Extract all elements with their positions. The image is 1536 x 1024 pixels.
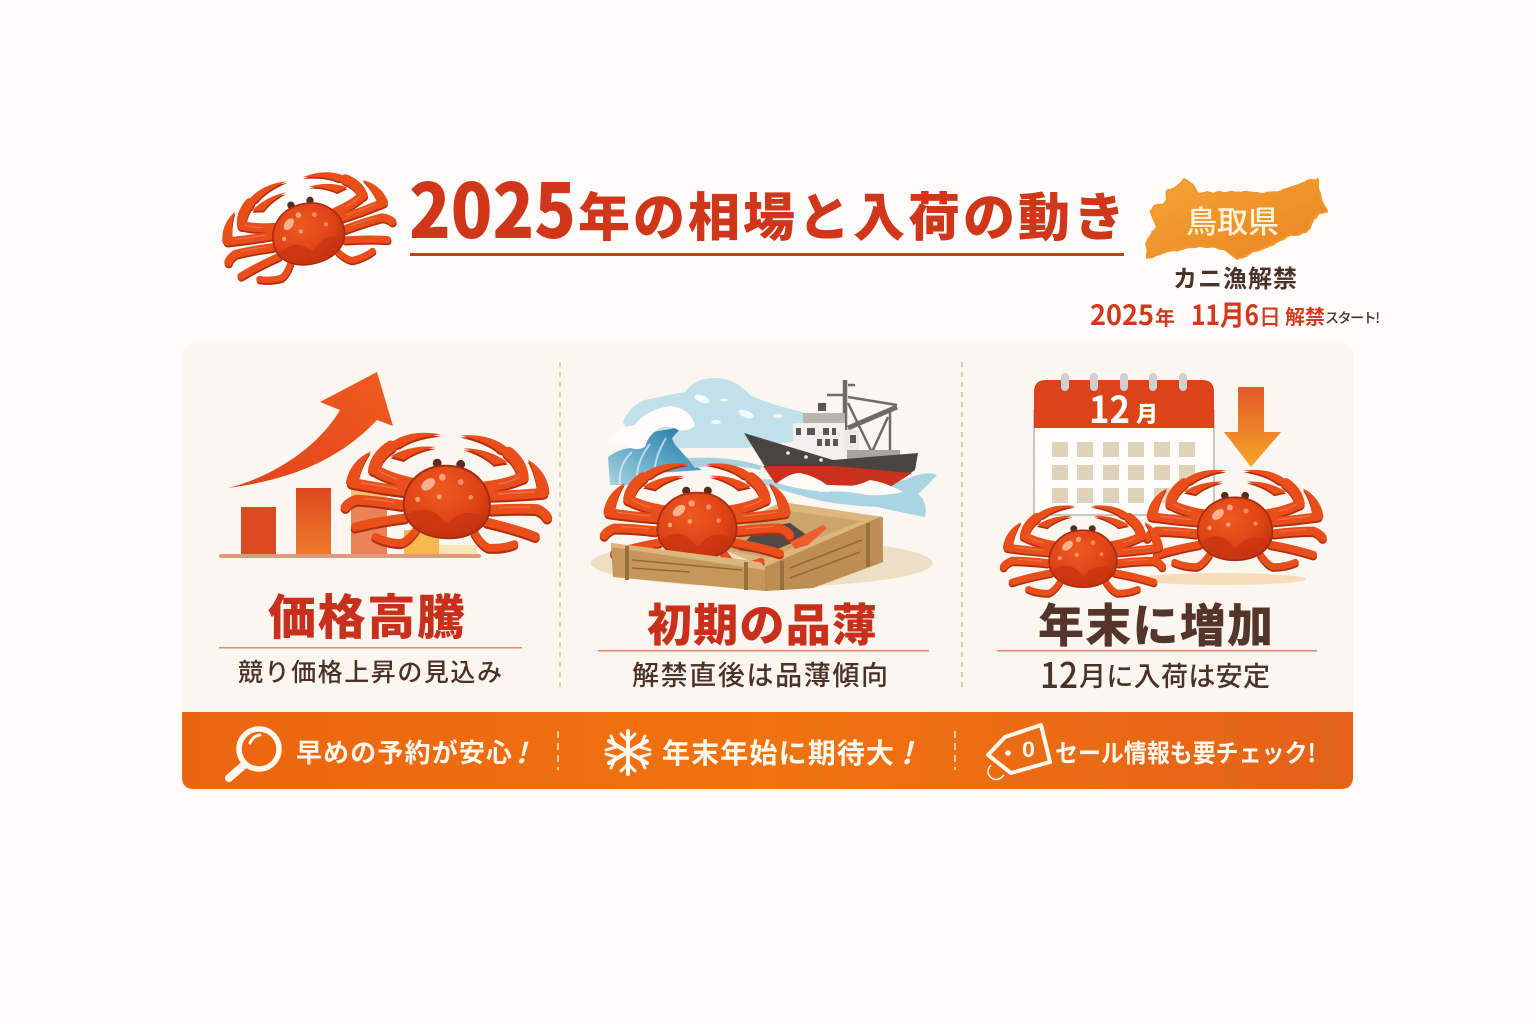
calendar: 月 [1136, 397, 1158, 429]
calendar: 12 [1089, 380, 1130, 434]
wave [608, 406, 702, 485]
icon: large crab [1147, 470, 1323, 568]
text: opening date: 解禁 [1285, 301, 1325, 330]
sea [687, 458, 937, 517]
text: opening date: 11月6 [1191, 294, 1259, 334]
icon: price tag [988, 725, 1050, 780]
title: 年の相場と入荷の動き [578, 176, 1125, 251]
title underline [410, 253, 1124, 256]
sand shadow [591, 539, 933, 587]
heading: 初期の品薄 [647, 589, 877, 654]
map: Tottori prefecture [1146, 178, 1327, 259]
panel: price surge [219, 372, 552, 689]
text: check sale info: セール情報も要チェック! [1055, 734, 1316, 770]
divider rule [997, 650, 1317, 652]
text: opening date: スタート! [1325, 308, 1380, 328]
description: 月に入荷は安定 [1079, 655, 1270, 694]
divider [559, 362, 561, 690]
description: 競り価格上昇の見込み [238, 653, 502, 689]
icon: small crab [1003, 505, 1163, 595]
panel: year-end increase [997, 373, 1323, 699]
icon: crab [603, 463, 791, 568]
title: 2025 [409, 151, 576, 260]
icon: magnifier [229, 729, 279, 778]
heading: 価格高騰 [268, 578, 465, 648]
map: Tottori prefecture: 鳥取県 [1186, 197, 1279, 242]
arrow: down [1224, 387, 1281, 467]
bottom band [182, 712, 1353, 789]
text: book early: ! [516, 732, 529, 772]
shadow [1138, 573, 1306, 585]
wooden crate front [611, 517, 883, 591]
text: opening date: 日 [1259, 300, 1281, 332]
icon: snowflake [606, 731, 650, 774]
icon: price tag: 0 [1022, 737, 1035, 762]
text: opening date [1090, 294, 1380, 334]
divider [954, 731, 956, 770]
text: book early: 早めの予約が安心 [296, 733, 512, 770]
text: year-end expectation: 年末年始に期待大 [662, 732, 894, 772]
heading: 年末に増加 [1038, 590, 1273, 656]
calendar [1034, 373, 1214, 515]
sky and clouds [623, 378, 805, 450]
fishing boat [744, 380, 918, 495]
panel: early shortage [591, 378, 937, 693]
description: 解禁直後は品薄傾向 [632, 654, 888, 693]
title [409, 151, 1125, 260]
icon: title crab [212, 158, 400, 292]
divider [961, 362, 963, 690]
text: opening date: 2025 [1090, 294, 1154, 334]
arrow: rising price [228, 372, 393, 488]
wooden crate back [700, 502, 883, 567]
description [1040, 648, 1270, 699]
icon: crab [343, 429, 552, 553]
bar chart [219, 488, 481, 558]
text: opening date: 年 [1155, 302, 1175, 331]
divider rule [598, 650, 929, 652]
text: crab fishing opens: カニ漁解禁 [1173, 259, 1297, 294]
text: year-end expectation: ! [901, 729, 915, 773]
divider rule [219, 647, 522, 648]
divider [557, 731, 559, 770]
header [212, 151, 1380, 334]
description: 12 [1040, 648, 1078, 699]
main panel [182, 343, 1353, 789]
